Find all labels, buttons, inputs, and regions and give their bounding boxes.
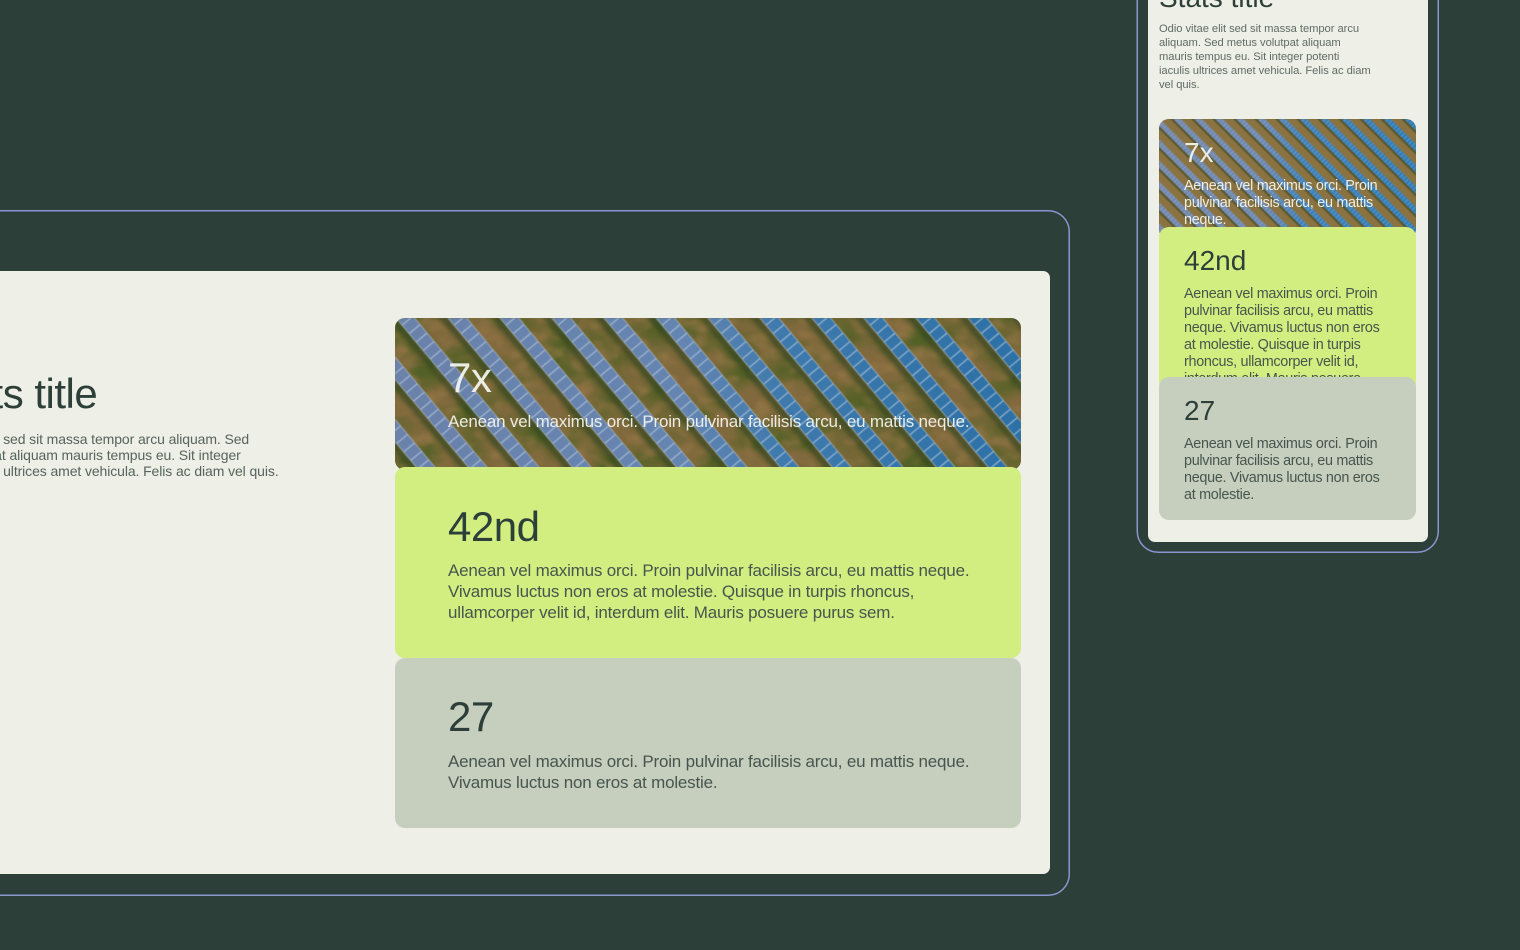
card: 42nd stat [395, 467, 1021, 658]
stat description: small 42nd: Aenean vel maximus orci. Proin [1184, 286, 1377, 302]
text block: stats intro [0, 431, 279, 479]
text block: small stats intro [1159, 23, 1371, 91]
stat description: small 42nd: interdum elit. Mauris posuere [1184, 371, 1361, 387]
stat description: 42nd: Vivamus luctus non eros at molestie. Quisque in turpis rhoncus, [448, 582, 914, 601]
stat description: small 42nd: pulvinar facilisis arcu, eu mattis [1184, 303, 1373, 319]
stat description: small 7x: pulvinar facilisis arcu, eu mattis [1184, 195, 1373, 211]
stat description: 27: Aenean vel maximus orci. Proin pulvinar facilisis arcu, eu mattis neque. [448, 752, 969, 771]
text block: small stats intro: vel quis. [1159, 79, 1200, 91]
card: 7x solar image [395, 318, 1021, 470]
image: solar panel field [395, 318, 1021, 468]
text block: small stats intro: iaculis ultrices amet vehicula. Felis ac diam [1159, 65, 1371, 77]
card: 27 stat [395, 658, 1021, 828]
stat description: 42nd: Aenean vel maximus orci. Proin pulvinar facilisis arcu, eu mattis neque. [448, 561, 969, 580]
stat description: 7x: Aenean vel maximus orci. Proin pulvinar facilisis arcu, eu mattis neque. [448, 412, 969, 431]
stat value: 7x: 7x [448, 354, 491, 401]
stat description: small 27 [1184, 436, 1380, 503]
text block: small stats intro: Odio vitae elit sed sit massa tempor arcu [1159, 23, 1359, 35]
stat description: small 42nd [1184, 286, 1380, 387]
card: small 27 stat [1159, 377, 1416, 520]
stat description: small 42nd: rhoncus, ullamcorper velit id, [1184, 354, 1358, 370]
stat description: small 7x [1184, 178, 1377, 228]
stat description: 42nd: ullamcorper velit id, interdum elit. Mauris posuere purus sem. [448, 603, 895, 622]
stat description: 27: Vivamus luctus non eros at molestie. [448, 773, 717, 792]
stat description: 42nd [448, 561, 969, 622]
text block: small stats intro: mauris tempus eu. Sit integer potenti [1159, 51, 1339, 63]
stat description: small 42nd: at molestie. Quisque in turpis [1184, 337, 1361, 353]
stat value: small 27: 27 [1184, 395, 1215, 426]
stat description: small 27: neque. Vivamus luctus non eros [1184, 470, 1380, 486]
stat description: small 27: Aenean vel maximus orci. Proin [1184, 436, 1377, 452]
card: small 7x solar image [1159, 119, 1416, 239]
stat description: 27 [448, 752, 969, 792]
text block: small stats intro: aliquam. Sed metus volutpat aliquam [1159, 37, 1341, 49]
image: small solar panel field [1159, 119, 1416, 233]
stat description: small 42nd: neque. Vivamus luctus non eros [1184, 320, 1380, 336]
card: small 42nd stat [1159, 227, 1416, 392]
stat description: small 7x: neque. [1184, 212, 1226, 228]
stat description: small 27: pulvinar facilisis arcu, eu mattis [1184, 453, 1373, 469]
stat value: small 42nd: 42nd [1184, 245, 1246, 276]
panel: large stats layout [0, 271, 1050, 874]
stat description: small 27: at molestie. [1184, 487, 1254, 503]
stat value: 42nd: 42nd [448, 503, 539, 550]
stat value: small 7x: 7x [1184, 137, 1214, 168]
panel: small stats layout [1148, 0, 1428, 542]
stat description: small 7x: Aenean vel maximus orci. Proin [1184, 178, 1377, 194]
stat value: 27: 27 [448, 693, 494, 740]
